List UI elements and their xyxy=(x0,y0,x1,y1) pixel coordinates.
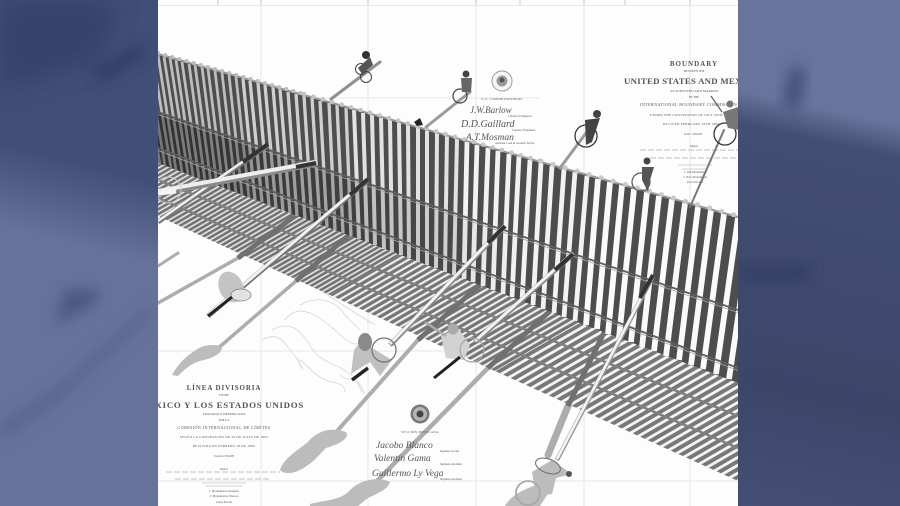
Mexican section signatures: SECCIÓN MEXICANA xyxy=(401,429,439,434)
map title: boundary, English: BETWEEN THE xyxy=(684,69,705,73)
US commissioners signatures: Colonel of Engineers xyxy=(508,115,532,118)
map contour lines xyxy=(262,290,375,394)
panel: photo of the wall on the boundary map xyxy=(134,0,766,506)
US commissioners signatures: D.D.Gaillard xyxy=(460,119,516,130)
map title: boundary, Spanish: TRAZADA Y DEMARCADA xyxy=(202,412,246,416)
map title: boundary, English: REVIVED FEBRUARY 18TH 1889 xyxy=(663,122,719,126)
map title: boundary, Spanish xyxy=(158,384,303,503)
map title: boundary, Spanish: REVIVIDA EN FEBRERO 18 DE 1889 xyxy=(193,444,255,448)
map title: boundary, Spanish: LÍNEA DIVISORIA xyxy=(187,384,261,392)
dark pole ends xyxy=(243,144,653,298)
figure shadows on the paper xyxy=(172,345,556,506)
map title: boundary, Spanish: 1. Monumentos Antiguos xyxy=(209,489,240,493)
wall of vertical bars xyxy=(134,48,766,384)
map title: boundary, English: AS SURVEYED AND MARKED xyxy=(670,89,718,93)
map title: boundary, Spanish: POR LA xyxy=(219,418,230,422)
map title: boundary, English: Parcel Roads xyxy=(687,180,704,184)
map title: boundary, English: UNDER THE CONVENTION OF JULY 29TH 1882 xyxy=(650,113,732,117)
map title: boundary, Spanish: Linea Parcial xyxy=(216,500,232,504)
panel: blurred left side background xyxy=(0,0,158,506)
small figure on wall xyxy=(414,118,423,126)
map title: boundary, Spanish: SEGÚN LA CONVENCIÓN DE 29 DE JULIO DE 1882 xyxy=(180,434,268,439)
US seal xyxy=(492,71,512,91)
figure with wheel, far left xyxy=(155,177,181,203)
poles in front of the wall xyxy=(158,144,653,460)
Mexican section signatures: Valentín Gama xyxy=(374,454,431,464)
poles behind the wall xyxy=(331,62,724,207)
Mexican seal xyxy=(410,404,430,424)
US commissioners signatures: Assistant Coast & Geodetic Survey xyxy=(495,142,535,145)
map title: boundary, English: INTERNATIONAL BOUNDARY COMMISSION xyxy=(640,102,737,107)
map title: boundary, English: UNITED STATES AND MEXICO xyxy=(624,76,759,86)
rider on wall 4 xyxy=(632,158,654,192)
US commissioners signatures: Captain of Engineers xyxy=(512,129,536,132)
map title: boundary, Spanish: COMISIÓN INTERNACIONAL DE LÍMITES xyxy=(177,425,271,430)
map grid xyxy=(158,0,738,506)
rider on wall 5 xyxy=(711,96,738,145)
Mexican section signatures xyxy=(372,429,463,481)
figure with wheel 3 xyxy=(425,322,484,378)
figure with wheel 1 xyxy=(208,267,251,316)
ground shadow of the wall xyxy=(158,163,738,481)
map title: boundary, Spanish: Escala 1:60,000 xyxy=(213,454,234,459)
Mexican section signatures: Ingeniero en Jefe xyxy=(440,450,460,453)
rider on wall 2 xyxy=(453,70,472,103)
Mexican section signatures: Ingeniero Ayudante xyxy=(440,478,463,481)
map title: boundary, English: BY THE xyxy=(689,96,699,99)
map title: boundary, English xyxy=(624,61,738,183)
panel: blurred right side background xyxy=(738,0,900,424)
Mexican section signatures: Ingeniero Ayudante xyxy=(440,463,463,466)
US commissioners signatures: U.S. COMMISSIONERS xyxy=(481,97,523,101)
rider on wall 1 xyxy=(356,51,373,82)
map paper background xyxy=(158,0,738,506)
map title: boundary, Spanish: ENTRE xyxy=(219,393,229,397)
US commissioners signatures xyxy=(460,97,536,145)
wall top caps xyxy=(158,54,738,217)
rider on wall 3 xyxy=(575,110,601,147)
US commissioners signatures: J.W.Barlow xyxy=(470,105,512,115)
map title: boundary, Spanish: Metros xyxy=(220,468,228,471)
wall rails xyxy=(158,112,738,368)
map title: boundary, English: 2. New Monuments xyxy=(683,175,708,179)
map title: boundary, English: BOUNDARY xyxy=(670,60,718,68)
figure with wheel 2 xyxy=(351,333,396,380)
US commissioners signatures: A.T.Mosman xyxy=(465,133,514,143)
lower wall shading xyxy=(158,113,486,286)
Mexican section signatures: Jacobo Blanco xyxy=(376,441,433,451)
map title: boundary, English: Scale 1:60,000 xyxy=(684,132,702,137)
map title: boundary, English: 1. Old Monuments xyxy=(684,170,707,174)
map title: boundary, English: Meters xyxy=(690,145,698,148)
pole shadows on the paper xyxy=(158,253,568,483)
map title: boundary, Spanish: 2. Monumentos Nuevos xyxy=(210,494,239,498)
figure with wheel 4 xyxy=(516,455,572,505)
map title: boundary, Spanish: MEXICO Y LOS ESTADOS UNIDOS xyxy=(140,400,304,410)
Mexican section signatures: Guillermo Ly Vega xyxy=(372,469,444,479)
